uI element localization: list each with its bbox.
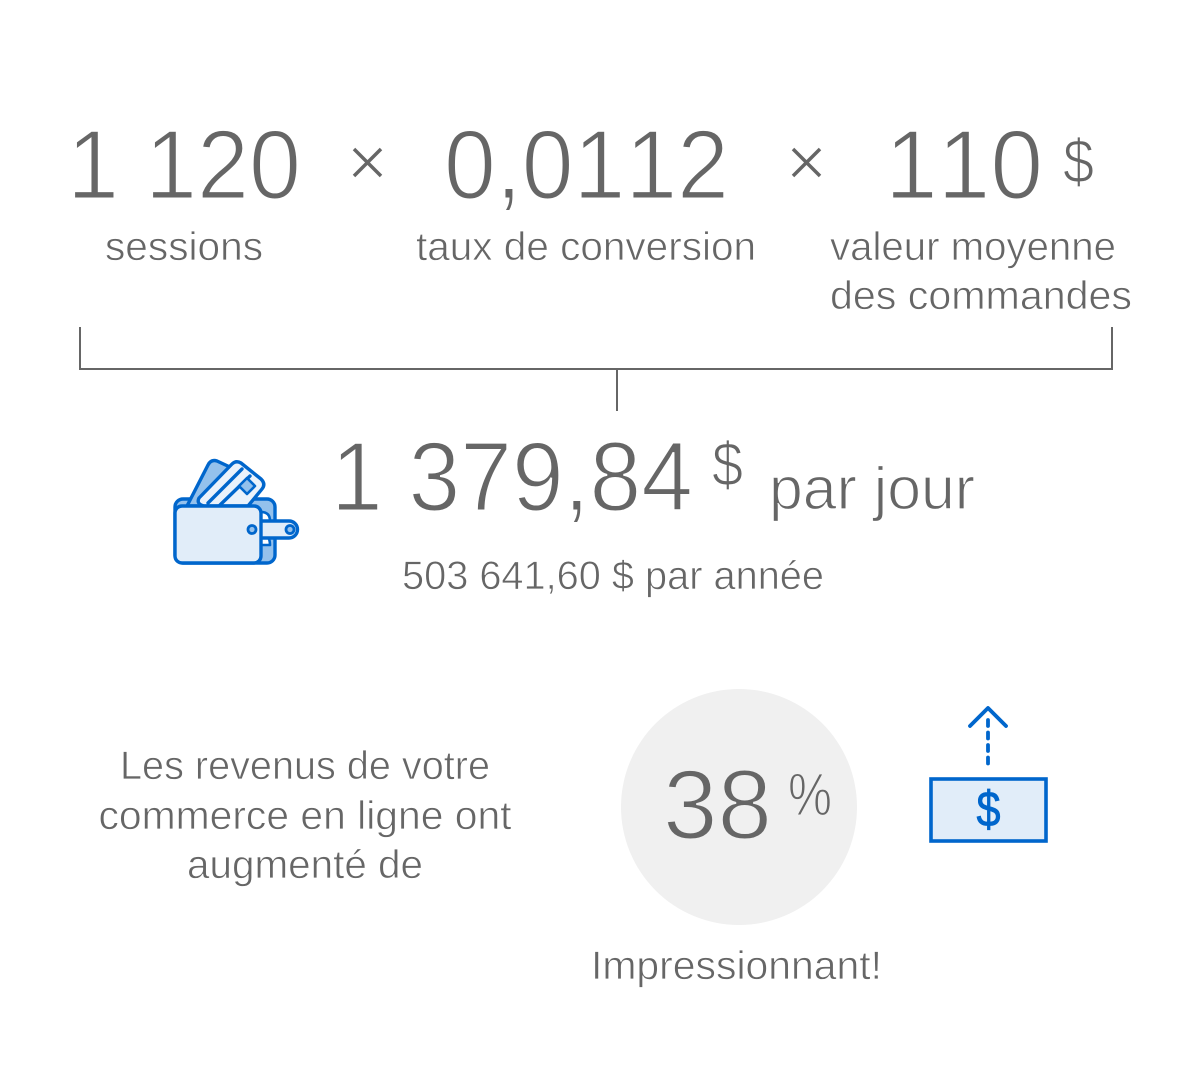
text: revenue increase: augmenté de	[187, 843, 423, 887]
text: revenue increase: commerce en ligne ont	[98, 794, 512, 838]
circle: 38 percent	[621, 689, 857, 925]
label: per year: 503 641,60 $ par année	[402, 554, 824, 598]
icon: dollar bill with up arrow	[931, 708, 1046, 841]
icon: dollar bill with up arrow: $	[976, 781, 1000, 837]
label: average order value	[830, 225, 1132, 318]
dollar sign: $	[712, 431, 743, 500]
label: average order value: valeur moyenne	[830, 225, 1116, 269]
dollar sign: $	[1063, 128, 1094, 197]
multiply sign 2	[793, 149, 820, 176]
label: average order value: des commandes	[830, 274, 1132, 318]
number: sessions: 1 120	[67, 110, 301, 220]
number: average order value: 110	[885, 110, 1043, 220]
text: revenue increase	[98, 744, 512, 887]
label: sessions: sessions	[105, 225, 263, 269]
label: per day: par jour	[769, 455, 975, 522]
circle: 38 percent: %	[788, 761, 832, 828]
circle: 38 percent: 38	[663, 750, 772, 860]
label: conversion rate: taux de conversion	[416, 225, 756, 269]
number: revenue per day: 1 379,84	[331, 422, 693, 532]
multiply sign 1	[354, 149, 381, 176]
bracket	[80, 327, 1112, 411]
number: conversion rate: 0,0112	[444, 110, 729, 220]
text: revenue increase: Les revenus de votre	[120, 744, 490, 788]
icon: wallet	[175, 460, 298, 563]
label: impressive: Impressionnant!	[591, 944, 882, 988]
